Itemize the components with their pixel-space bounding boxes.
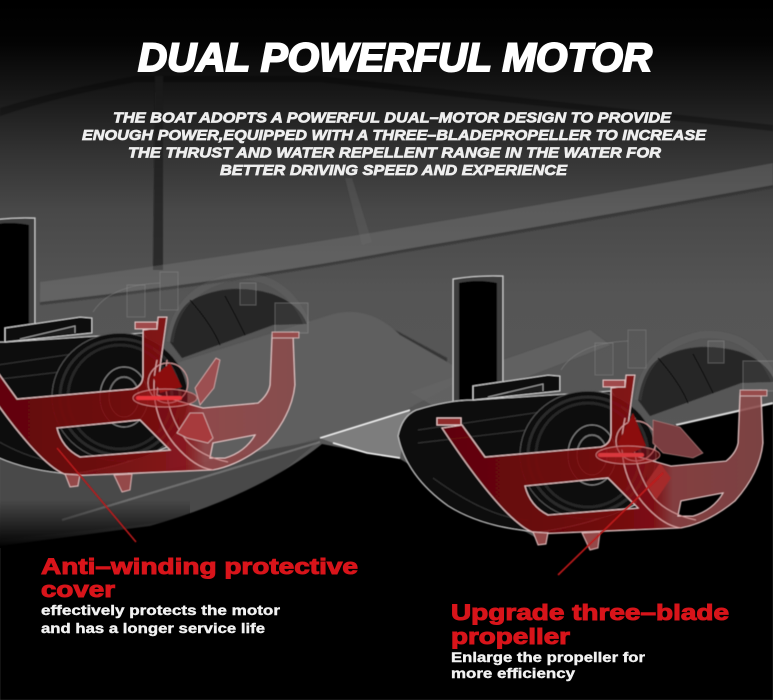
leader line: propeller — [558, 473, 663, 575]
propeller description — [451, 650, 646, 681]
callout: upgrade three-blade propeller — [451, 600, 729, 681]
left motor assembly — [0, 218, 308, 492]
callout: anti-winding protective cover — [41, 554, 358, 636]
right motor three-blade propeller — [596, 413, 703, 500]
callout heading — [41, 554, 358, 602]
intro paragraph: BETTER DRIVING SPEED AND EXPERIENCE — [220, 162, 568, 179]
left motor protective cage — [0, 317, 299, 492]
callout description: and has a longer service life — [41, 621, 266, 636]
hull edge highlight — [676, 403, 773, 425]
right motor assembly — [398, 276, 773, 550]
intro paragraph: ENOUGH POWER,EQUIPPED WITH A THREE–BLADEPROPELLER TO INCREASE — [82, 127, 707, 144]
intro paragraph: THE THRUST AND WATER REPELLENT RANGE IN THE WATER FOR — [128, 144, 661, 162]
leader line: anti-winding cover — [57, 448, 136, 542]
left motor three-blade propeller — [133, 358, 220, 443]
callout description — [41, 603, 281, 636]
fade at hull base — [0, 500, 190, 548]
propeller heading: Upgrade three–blade — [451, 600, 729, 625]
black water area — [0, 404, 773, 700]
callout heading: Anti–winding protective — [41, 554, 358, 579]
propeller description: more efficiency — [451, 666, 576, 681]
callout heading: cover — [41, 577, 116, 602]
right motor protective cage — [437, 375, 767, 550]
callout description: effectively protects the motor — [41, 603, 281, 618]
propeller heading: propeller — [451, 624, 571, 649]
intro paragraph: THE BOAT ADOPTS A POWERFUL DUAL–MOTOR DESIGN TO PROVIDE — [113, 110, 672, 126]
propeller description: Enlarge the propeller for — [451, 650, 646, 665]
title: DUAL POWERFUL MOTOR — [138, 36, 652, 80]
intro paragraph — [82, 110, 707, 179]
white hull reflection streak — [320, 410, 410, 458]
propeller heading — [451, 600, 729, 649]
